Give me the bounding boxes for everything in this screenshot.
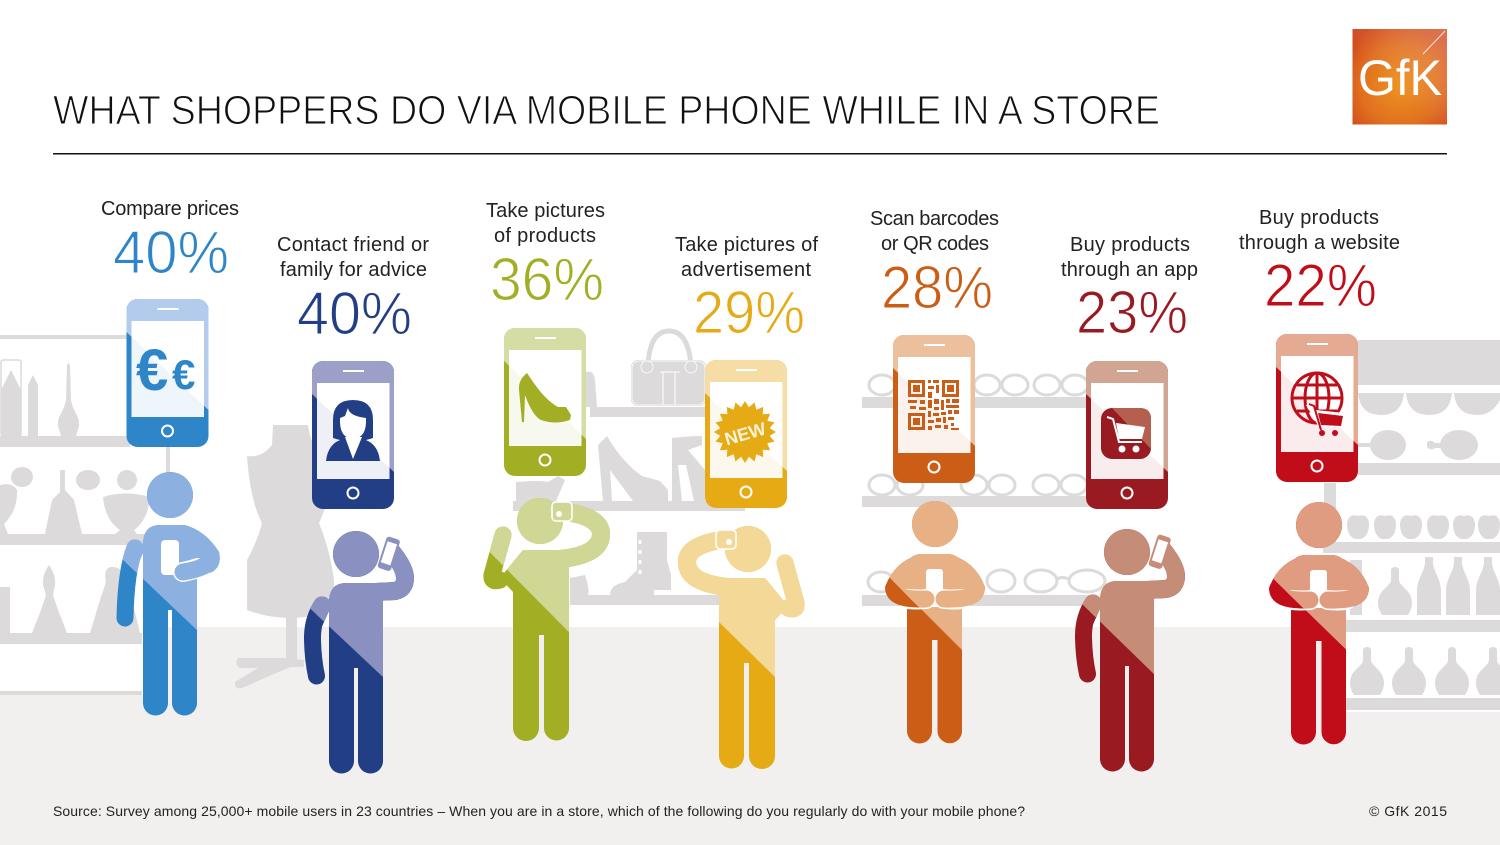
person scanning with both hands — [885, 501, 985, 744]
label: compare prices: Compare prices — [101, 198, 239, 220]
label: contact friend or family: Contact friend or — [277, 234, 429, 256]
label: scan barcodes or QR codes — [870, 208, 999, 255]
phone with euro icon: € — [136, 338, 168, 403]
small phone at ear — [1148, 534, 1172, 570]
column 6: buy through app — [1061, 234, 1198, 771]
stat: 36%: 36% — [490, 246, 604, 313]
phone with NEW badge: NEW — [722, 419, 768, 449]
column 3: take pictures of products — [486, 200, 605, 741]
label: buy products through a website: through a website — [1239, 232, 1400, 254]
source note: Source: Survey among 25,000+ mobile users in 23 countries – When you are in a store, which of the following do you regularly do with your mobile phone? — [53, 803, 1025, 819]
stat: 40%: 40% — [113, 219, 229, 286]
column 2: contact friend — [277, 234, 429, 773]
stat: 22%: 22% — [1264, 252, 1377, 319]
label: contact friend or family — [277, 234, 429, 281]
label: buy products through a website — [1239, 207, 1400, 254]
background: grocery shelves — [1323, 340, 1500, 712]
person calling — [309, 531, 405, 773]
label: take pictures of products: Take pictures — [486, 200, 605, 222]
phone with euro icon — [126, 299, 208, 447]
store floor background — [0, 627, 1500, 845]
small phone at ear — [377, 536, 401, 572]
background: bag and shoe shelves — [513, 331, 745, 605]
person calling — [1080, 529, 1176, 771]
label: buy products through an app — [1061, 234, 1198, 281]
label: buy products through an app: through an app — [1061, 259, 1198, 281]
column 4: take pictures of advertisement — [675, 234, 818, 769]
column 7: buy through website — [1239, 207, 1400, 744]
background: cosmetics shelves — [0, 335, 170, 695]
person scanning with both hands — [1269, 502, 1369, 744]
stat: 40%: 40% — [297, 280, 412, 347]
stat: 23%: 23% — [1076, 279, 1188, 346]
GfK logo — [1352, 29, 1447, 124]
phone with euro icon: € — [172, 351, 195, 398]
label: scan barcodes or QR codes: or QR codes — [881, 233, 989, 255]
phone with globe and cart — [1276, 334, 1358, 482]
phone with woman portrait — [312, 361, 394, 509]
phone with NEW badge — [705, 360, 787, 508]
title: WHAT SHOPPERS DO VIA MOBILE PHONE WHILE IN A STORE — [53, 87, 1160, 133]
label: take pictures of advertisement: Take pictures of — [675, 234, 818, 256]
label: buy products through an app: Buy products — [1070, 234, 1190, 256]
person reading phone — [122, 472, 220, 716]
phone with high heel icon — [504, 328, 586, 476]
GfK logo: GfK — [1358, 50, 1442, 106]
label: take pictures of products — [486, 200, 605, 247]
person taking picture — [492, 498, 601, 741]
background: mannequin — [235, 425, 334, 688]
label: take pictures of products: of products — [494, 225, 596, 247]
label: take pictures of advertisement — [675, 234, 818, 281]
label: buy products through a website: Buy products — [1259, 207, 1379, 229]
background: glasses shelves — [862, 375, 1105, 606]
stat: 28%: 28% — [881, 254, 993, 321]
phone with shopping cart app — [1086, 361, 1168, 509]
person taking picture, mirrored — [687, 526, 796, 769]
copyright: © GfK 2015 — [1369, 803, 1447, 819]
label: take pictures of advertisement: advertisement — [681, 259, 811, 281]
phone with QR code — [893, 335, 975, 483]
label: contact friend or family: family for advice — [280, 259, 427, 281]
stat: 29%: 29% — [693, 279, 805, 346]
column 1: compare prices — [101, 198, 239, 716]
column 5: scan barcodes — [870, 208, 999, 744]
label: scan barcodes or QR codes: Scan barcodes — [870, 208, 999, 230]
